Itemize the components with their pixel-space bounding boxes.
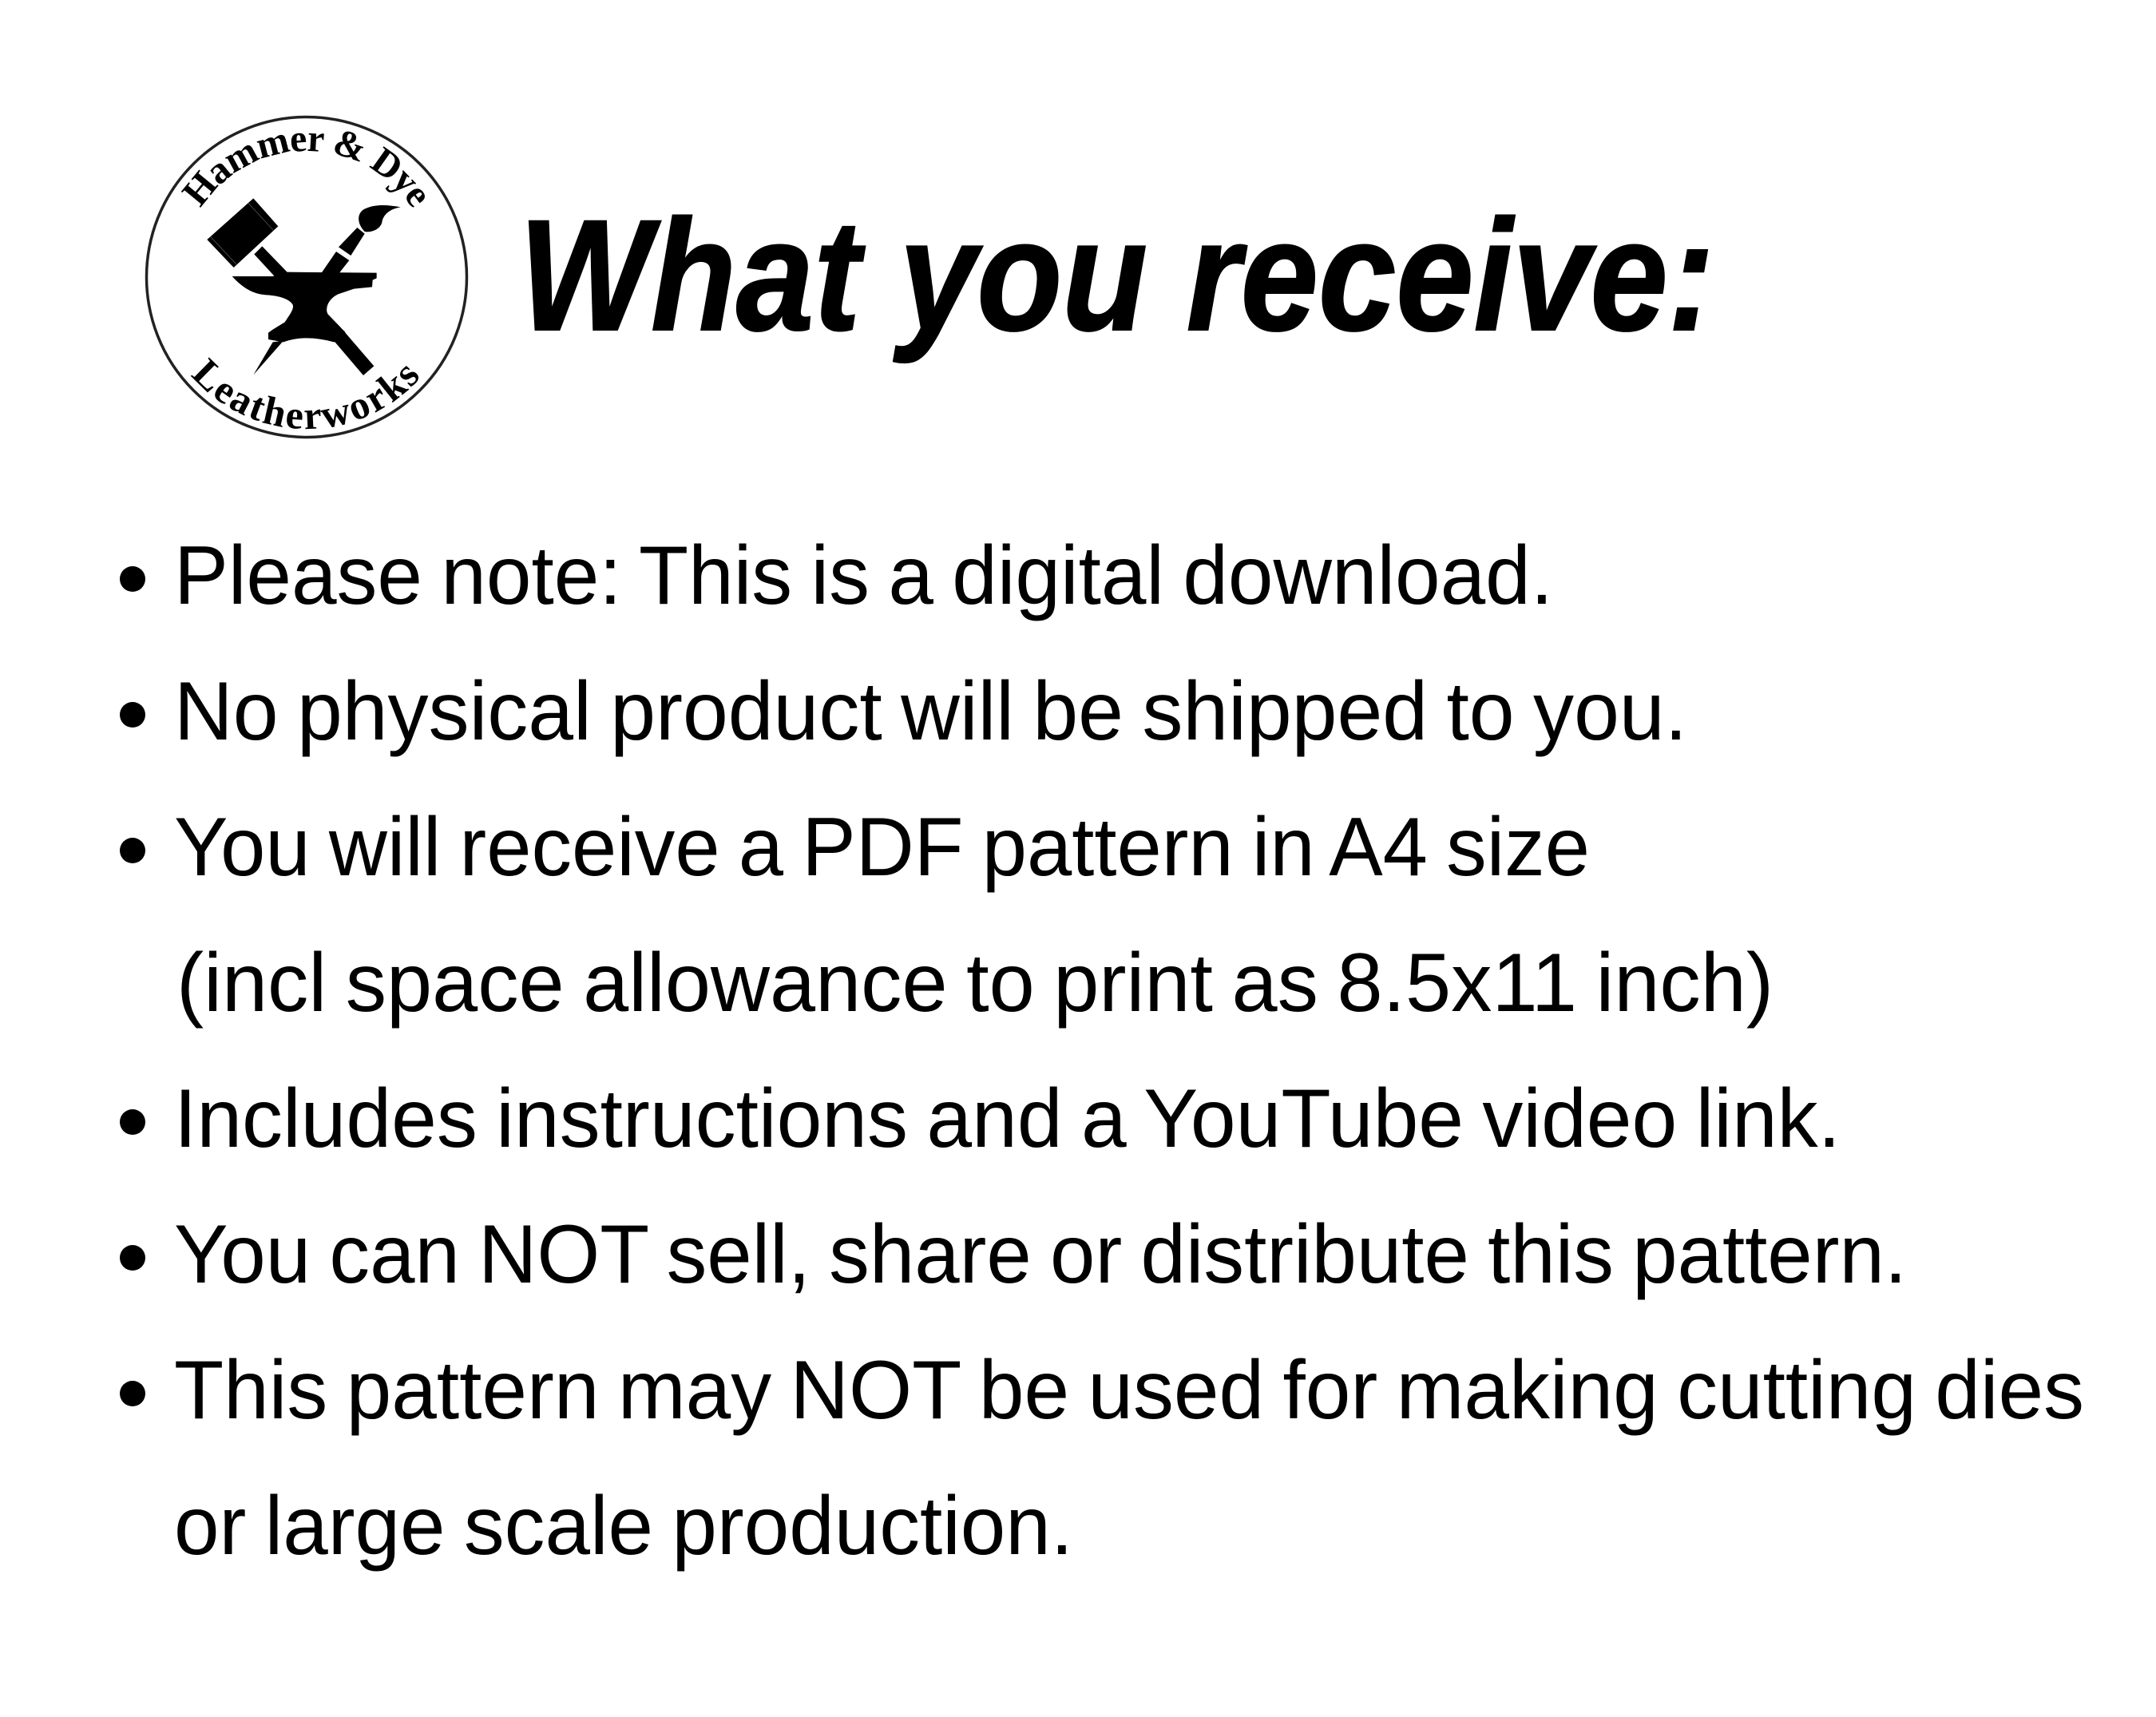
title: What you receive:	[519, 187, 1714, 363]
bullet 5: You can NOT sell, share or distribute this pattern.	[174, 1208, 1907, 1301]
bullet 4: Includes instructions and a YouTube video link.	[174, 1073, 1841, 1165]
bullet 6	[120, 1344, 2084, 1572]
logo text: Hammer & Dye: Hammer & Dye	[180, 131, 425, 208]
bullet 6: This pattern may NOT be used for making cutting dies	[174, 1344, 2084, 1437]
bullet 6: or large scale production.	[174, 1480, 1073, 1572]
logo emblem: mallet, brush and anvil	[207, 198, 401, 375]
bullet 3	[120, 801, 1774, 1029]
bullet 2: No physical product will be shipped to you.	[174, 665, 1687, 758]
bullet list	[120, 529, 2084, 1572]
bullet 3: You will receive a PDF pattern in A4 size	[174, 801, 1590, 894]
bullet 3: (incl space allowance to print as 8.5x11 inch)	[176, 937, 1774, 1029]
logo ring	[147, 117, 466, 438]
bullet 1: Please note: This is a digital download.	[174, 529, 1553, 622]
logo: Hammer & Dye Leatherworks badge	[145, 115, 468, 439]
logo text: Leatherworks: Leatherworks	[190, 358, 418, 430]
